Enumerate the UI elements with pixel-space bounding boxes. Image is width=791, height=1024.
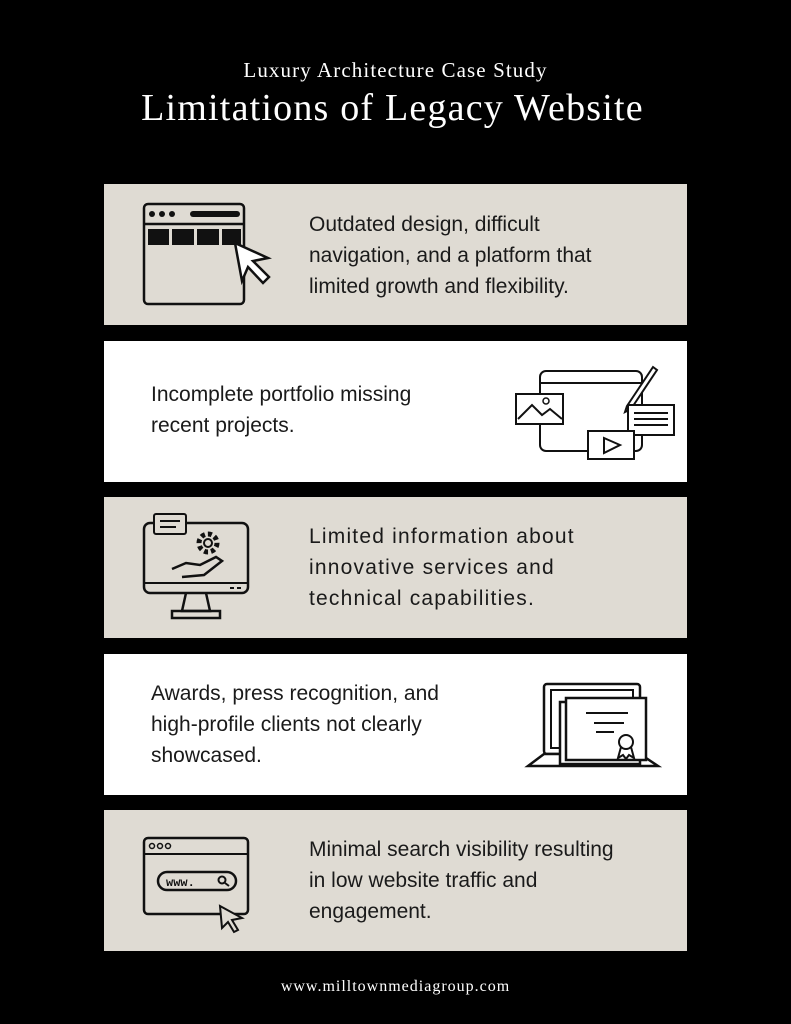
icon: browser with cursor (142, 202, 272, 306)
text 5: in low website traffic and (309, 869, 537, 892)
panel 5 (104, 810, 687, 951)
icon: browser search: www. (166, 876, 195, 890)
text 4 (151, 682, 439, 767)
text 4: Awards, press recognition, and (151, 682, 439, 705)
text 2: recent projects. (151, 414, 295, 437)
text 5: engagement. (309, 900, 432, 923)
panel 2 (104, 341, 687, 482)
text 3: Limited information about (309, 525, 575, 548)
icon: media content (515, 366, 675, 460)
text 4: showcased. (151, 744, 262, 767)
panel 1 (104, 184, 687, 325)
text 5: Minimal search visibility resulting (309, 838, 614, 861)
icon: browser search (142, 836, 250, 934)
panel 3 (104, 497, 687, 638)
text 4: high-profile clients not clearly (151, 713, 422, 736)
text 1: Outdated design, difficult (309, 213, 540, 236)
text 3: technical capabilities. (309, 587, 535, 610)
text 3 (309, 525, 575, 610)
icon: monitor with gear (142, 513, 250, 620)
icon: laptop with certificate (524, 682, 662, 768)
text 1: navigation, and a platform that (309, 244, 592, 267)
footer url: www.milltownmediagroup.com (281, 978, 510, 995)
text 3: innovative services and (309, 556, 555, 579)
text 1: limited growth and flexibility. (309, 275, 569, 298)
panel 4 (104, 654, 687, 795)
text 2 (151, 383, 411, 437)
text 1 (309, 213, 592, 298)
text 2: Incomplete portfolio missing (151, 383, 411, 406)
subtitle: Luxury Architecture Case Study (243, 58, 548, 82)
text 5 (309, 838, 614, 923)
title: Limitations of Legacy Website (141, 87, 644, 129)
